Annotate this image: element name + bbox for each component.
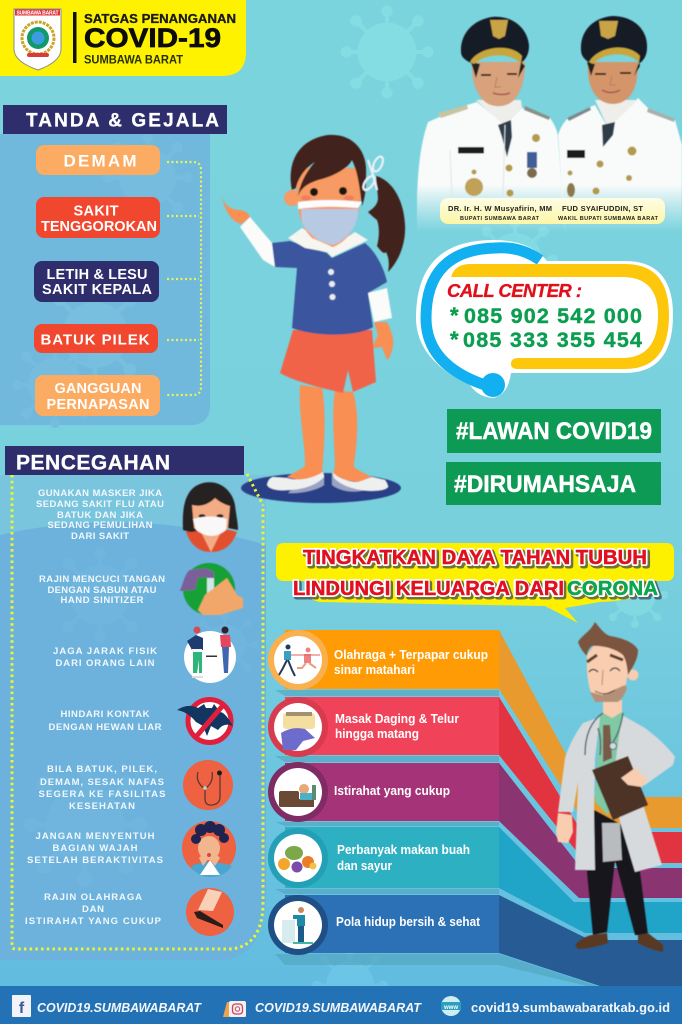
prevention 4 text: DENGAN HEWAN LIAR bbox=[48, 722, 162, 733]
icon: sumbawa barat shield logo bbox=[14, 9, 61, 70]
phone numbers bbox=[450, 303, 642, 352]
phone numbers: * bbox=[450, 327, 459, 352]
prevention 2 text: DENGAN SABUN ATAU bbox=[48, 585, 157, 596]
neck bbox=[603, 700, 622, 718]
heading: tanda dan gejala: TANDA & GEJALA bbox=[26, 110, 219, 132]
phone numbers: 085 902 542 000 bbox=[464, 304, 642, 328]
icon: no bats bbox=[177, 700, 233, 742]
collar bbox=[288, 228, 368, 257]
dotted connector bbox=[167, 162, 201, 395]
prevention 6 text: JANGAN MENYENTUH bbox=[36, 831, 155, 842]
hair bbox=[291, 135, 366, 206]
prevention 5 text: DEMAM, SESAK NAFAS bbox=[40, 777, 164, 788]
holding hand bbox=[621, 768, 648, 787]
icon: sumbawa barat shield logo: SUMBAWA BARAT bbox=[16, 10, 58, 16]
symptom: sakit tenggorokan: TENGGOROKAN bbox=[41, 219, 157, 235]
prevention 6 text: SETELAH BERAKTIVITAS bbox=[27, 855, 163, 866]
person right bbox=[220, 626, 231, 673]
symptom: sakit tenggorokan: SAKIT bbox=[74, 204, 119, 220]
symptom: batuk pilek: BATUK PILEK bbox=[40, 332, 150, 348]
icon: sleeping in bed bbox=[279, 784, 316, 807]
speech bubble bbox=[276, 543, 674, 623]
title text: SUMBAWA BARAT bbox=[84, 54, 183, 66]
prevention 7 text bbox=[25, 892, 162, 927]
ribbon row: olahraga bbox=[268, 630, 499, 690]
prevention 1 text: DARI SAKIT bbox=[71, 531, 129, 542]
blue arc bbox=[426, 248, 540, 397]
instagram handle: COVID19.SUMBAWABARAT bbox=[255, 1000, 422, 1015]
right sleeve and hand bbox=[368, 288, 393, 360]
stethoscope bbox=[585, 713, 623, 755]
prevention 7 text: ISTIRAHAT YANG CUKUP bbox=[25, 916, 162, 927]
prevention 1 text: SEDANG PEMULIHAN bbox=[48, 520, 153, 531]
prevention list bbox=[25, 488, 166, 927]
legs bbox=[287, 385, 372, 482]
slogan line 2: CORONA bbox=[567, 577, 658, 600]
person left bbox=[187, 626, 203, 678]
head bbox=[284, 190, 300, 206]
head bbox=[587, 644, 628, 702]
ponytail bbox=[368, 176, 405, 272]
ribbon side: red bbox=[499, 697, 682, 863]
prevention 6 text: BAGIAN WAJAH bbox=[52, 843, 138, 854]
prevention 7 text: DAN bbox=[82, 904, 104, 915]
ribbon row: pola hidup bbox=[268, 895, 499, 955]
symptom: demam: DEMAM bbox=[64, 152, 136, 170]
shirt bbox=[595, 713, 623, 815]
officials portrait bbox=[417, 16, 682, 232]
prevention 4 text bbox=[48, 709, 162, 733]
icon: cooked food bbox=[281, 712, 315, 750]
prevention 3 text bbox=[53, 646, 157, 669]
icon: website globe: www bbox=[443, 1005, 458, 1011]
slogan line 1: TINGKATKAN DAYA TAHAN TUBUH bbox=[305, 548, 649, 571]
prevention 1 text: GUNAKAN MASKER JIKA bbox=[38, 488, 162, 499]
symptom: letih dan lesu, sakit kepala: SAKIT KEPALA bbox=[42, 282, 153, 298]
symptom: batuk pilek bbox=[34, 324, 158, 353]
ribbon row: masak: Masak Daging & Telur bbox=[335, 712, 459, 726]
name plate: DR. Ir. H. W Musyafirin, MM bbox=[448, 204, 552, 213]
prevention 5 text bbox=[38, 764, 166, 812]
eyebrows and eyes bbox=[587, 655, 623, 685]
ribbon side: orange bbox=[499, 630, 682, 828]
ribbon row: olahraga: sinar matahari bbox=[334, 663, 415, 677]
prevention 5 text: BILA BATUK, PILEK, bbox=[47, 764, 157, 775]
slogan line 2: LINDUNGI KELUARGA DARI CORONA bbox=[295, 579, 660, 602]
panel: tanda dan gejala background bbox=[0, 132, 210, 428]
ribbon side: teal bbox=[499, 827, 682, 933]
shadows bbox=[275, 690, 680, 989]
hashtag: dirumahsaja: #DIRUMAHSAJA bbox=[454, 471, 636, 498]
symptom: letih dan lesu, sakit kepala: LETIH & LESU bbox=[46, 267, 148, 283]
tie bbox=[603, 725, 612, 762]
ribbon row: buah dan sayur: Perbanyak makan buah bbox=[337, 843, 470, 857]
icon: stethoscope bbox=[183, 760, 233, 810]
prevention 3 text: DARI ORANG LAIN bbox=[56, 658, 155, 669]
ribbon side: blue bbox=[499, 895, 682, 986]
icon: facebook bbox=[12, 995, 31, 1017]
phone numbers: * bbox=[450, 303, 459, 328]
ribbon row: buah dan sayur: dan sayur bbox=[337, 859, 392, 873]
name plate: FUD SYAIFUDDIN, ST bbox=[562, 204, 643, 213]
icon: instagram bbox=[223, 1001, 246, 1017]
icon: facebook: f bbox=[19, 1000, 25, 1017]
slogan line 1: TINGKATKAN DAYA TAHAN TUBUH bbox=[303, 546, 647, 569]
inner lining bbox=[602, 823, 622, 862]
header divider bbox=[73, 12, 76, 63]
prevention 2 text: HAND SINITIZER bbox=[60, 595, 144, 606]
icon: washing hands bbox=[180, 563, 243, 615]
symptom: gangguan pernapasan bbox=[35, 375, 160, 416]
icon: fruit and vegetables bbox=[278, 846, 316, 872]
header: yellow banner bbox=[0, 0, 246, 76]
ribbon row: istirahat bbox=[268, 762, 499, 822]
name plate: BUPATI SUMBAWA BARAT bbox=[460, 216, 540, 222]
icon: website globe bbox=[441, 996, 461, 1016]
pants bbox=[587, 810, 648, 935]
beard bbox=[590, 685, 627, 702]
prevention 5 text: KESEHATAN bbox=[69, 801, 135, 812]
ribbon row: pola hidup: Pola hidup bersih & sehat bbox=[336, 915, 481, 929]
prevention 1 text bbox=[36, 488, 164, 542]
icon: do not touch face bbox=[182, 821, 236, 877]
ribbon row: masak: hingga matang bbox=[335, 727, 419, 741]
character: doctor bbox=[556, 622, 675, 952]
heading: tanda dan gejala bbox=[3, 105, 227, 134]
mask bbox=[301, 209, 358, 245]
heading: pencegahan: PENCEGAHAN bbox=[16, 452, 170, 474]
slogan line 1: TINGKATKAN DAYA TAHAN TUBUH bbox=[303, 546, 647, 569]
icon: runners bbox=[279, 644, 320, 676]
name plate: WAKIL BUPATI SUMBAWA BARAT bbox=[558, 216, 659, 222]
ribbon side: purple bbox=[499, 763, 682, 898]
prevention 2 text bbox=[39, 574, 165, 606]
symptom: gangguan pernapasan: GANGGUAN bbox=[54, 381, 142, 397]
ribbons chart bbox=[268, 630, 682, 989]
skirt bbox=[280, 330, 376, 393]
prevention 3 text: JAGA JARAK FISIK bbox=[53, 646, 157, 657]
title text bbox=[84, 11, 236, 66]
left arm and hand bbox=[222, 197, 275, 267]
name plate bbox=[440, 198, 665, 224]
hashtag: lawan covid19 bbox=[447, 409, 661, 453]
torso bbox=[272, 241, 387, 335]
coat right bbox=[613, 715, 675, 872]
title text: SATGAS PENANGANAN bbox=[84, 11, 236, 26]
official right bbox=[558, 16, 682, 232]
panel: pencegahan background bbox=[0, 475, 266, 960]
prevention 5 text: SEGERA KE FASILITAS bbox=[38, 789, 166, 800]
clipboard bbox=[592, 756, 648, 820]
buttons bbox=[328, 269, 336, 300]
shoes bbox=[267, 472, 388, 493]
prevention 2 text: RAJIN MENCUCI TANGAN bbox=[39, 574, 165, 585]
hashtag: dirumahsaja bbox=[446, 462, 661, 505]
prevention 4 text: HINDARI KONTAK bbox=[60, 709, 150, 720]
bow bbox=[361, 155, 385, 192]
symptom: letih dan lesu, sakit kepala bbox=[34, 261, 159, 302]
prevention 1 text: BATUK DAN JIKA bbox=[57, 510, 143, 521]
symptom: gangguan pernapasan: PERNAPASAN bbox=[46, 397, 150, 413]
eyes bbox=[310, 187, 347, 196]
icon: leg and shoe bbox=[186, 888, 234, 936]
call center text: CALL CENTER : bbox=[447, 280, 582, 301]
yellow outline bbox=[451, 264, 669, 369]
symptom: demam bbox=[36, 145, 160, 175]
title text: COVID-19 bbox=[84, 23, 221, 53]
character: girl with mask bbox=[222, 135, 405, 503]
hashtag: lawan covid19: #LAWAN COVID19 bbox=[456, 418, 652, 445]
symptom: sakit tenggorokan bbox=[36, 197, 160, 238]
pencegahan dotted border bbox=[12, 474, 263, 949]
facebook handle: COVID19.SUMBAWABARAT bbox=[37, 1000, 202, 1015]
decorative virus shapes bbox=[312, 5, 668, 1023]
floor shadow bbox=[241, 473, 401, 503]
shoes bbox=[575, 933, 663, 952]
official left bbox=[417, 17, 566, 232]
call center card bbox=[416, 240, 673, 398]
hand bbox=[556, 813, 573, 843]
blush bbox=[301, 196, 354, 200]
prevention 6 text bbox=[27, 831, 163, 866]
ribbon row: buah dan sayur bbox=[268, 827, 499, 888]
website url: covid19.sumbawabaratkab.go.id bbox=[471, 1000, 670, 1015]
ribbon row: istirahat: Istirahat yang cukup bbox=[334, 784, 450, 798]
icon: hygiene person bbox=[282, 907, 313, 944]
prevention 1 text: SEDANG SAKIT FLU ATAU bbox=[36, 499, 164, 510]
ribbon row: masak bbox=[268, 697, 499, 757]
heading: pencegahan bbox=[5, 446, 244, 475]
icon: woman with mask bbox=[183, 482, 238, 552]
slogan line 2: LINDUNGI KELUARGA DARI bbox=[293, 577, 564, 600]
coat left bbox=[558, 717, 600, 870]
white backing bbox=[416, 240, 673, 398]
ribbon row: olahraga: Olahraga + Terpapar cukup bbox=[334, 648, 488, 662]
slogan line 2: LINDUNGI KELUARGA DARI CORONA bbox=[293, 577, 658, 600]
phone numbers: 085 333 355 454 bbox=[463, 328, 642, 352]
hair bbox=[578, 622, 638, 675]
prevention 7 text: RAJIN OLAHRAGA bbox=[44, 892, 142, 903]
icon: physical distancing bbox=[184, 626, 236, 683]
footer bbox=[0, 986, 682, 1024]
